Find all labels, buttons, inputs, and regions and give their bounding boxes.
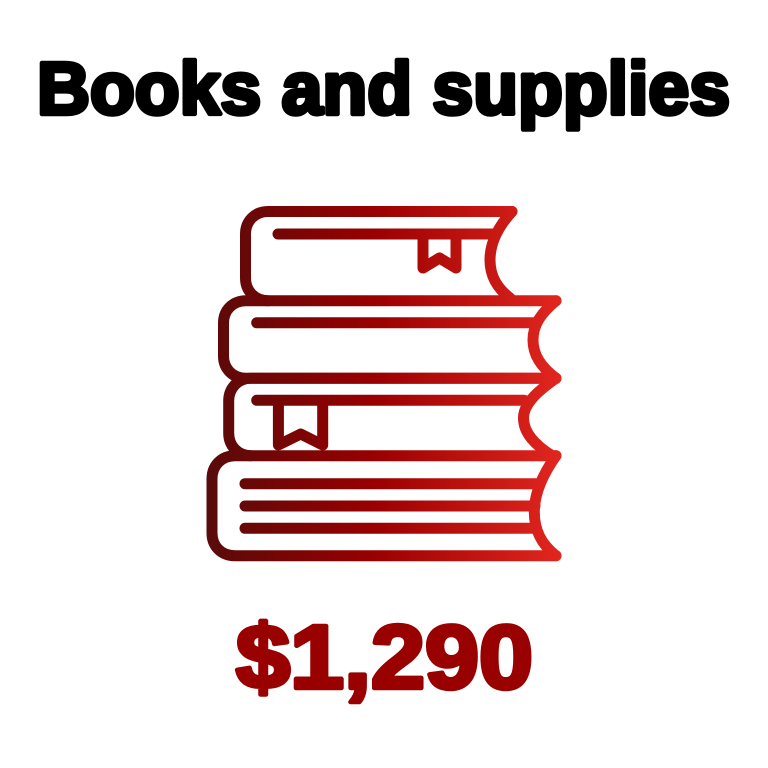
bottom book <box>212 456 556 556</box>
third book bookmark <box>278 401 323 445</box>
icon: stack of books <box>212 212 556 556</box>
price: $1,290 <box>236 608 533 708</box>
third book <box>229 378 556 456</box>
second book <box>224 301 556 378</box>
top book bookmark <box>423 236 456 268</box>
top book <box>246 212 512 301</box>
title: Books and supplies <box>37 47 730 130</box>
